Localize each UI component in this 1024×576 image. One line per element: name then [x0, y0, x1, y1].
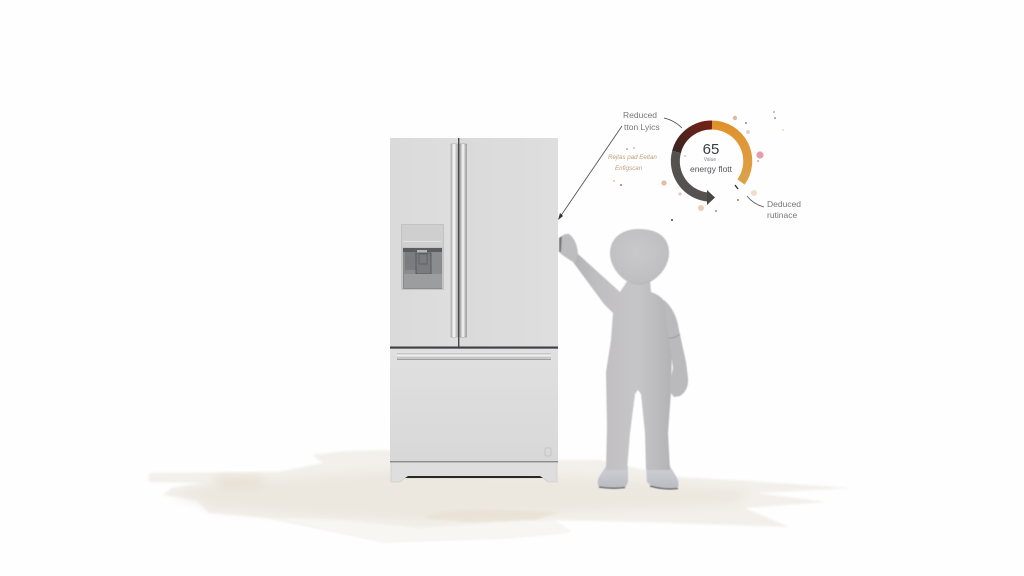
seam between doors and drawer	[390, 346, 558, 349]
left upper door	[390, 138, 458, 347]
small handwritten note: Rejtas pad Eeltan	[608, 154, 657, 161]
gauge label: energy flott	[690, 164, 733, 174]
freezer drawer	[390, 349, 558, 462]
head	[610, 229, 669, 285]
refrigerator	[390, 138, 558, 482]
callout line to refrigerator	[558, 126, 622, 220]
drawer handle	[397, 353, 551, 360]
lowered arm	[664, 300, 688, 397]
water dispenser	[401, 224, 444, 290]
drawer indicator	[545, 448, 551, 456]
forearm crease	[668, 334, 680, 338]
door gap	[458, 138, 459, 348]
gauge caption: Value	[704, 157, 716, 163]
torso, legs and raised arm	[573, 254, 672, 470]
decorative splatter dots	[613, 111, 784, 221]
small handwritten note: Enfigscan	[615, 165, 643, 172]
label: reduced top	[623, 110, 660, 132]
gauge grey segment with arrow	[675, 152, 715, 205]
label: reduced top: Reduced	[623, 110, 657, 120]
pointer to gauge top	[664, 118, 682, 128]
label: reduced bottom: Deduced	[767, 199, 801, 209]
label: reduced top: tton Lyics	[624, 122, 660, 132]
gauge dark red segment	[676, 125, 712, 152]
left door handle	[451, 144, 458, 337]
floor stain	[149, 450, 851, 542]
base plinth	[390, 461, 558, 482]
gauge orange segment	[712, 125, 748, 182]
gripping hand	[559, 234, 578, 263]
right door handle	[460, 144, 466, 337]
person figure	[559, 229, 688, 489]
label: reduced bottom	[767, 199, 801, 220]
shoes	[598, 466, 678, 489]
pointer to gauge bottom	[735, 185, 764, 207]
right upper door	[459, 138, 558, 347]
gauge value: 65	[703, 141, 719, 158]
energy gauge	[675, 125, 748, 205]
label: reduced bottom: rutinace	[767, 210, 798, 220]
small handwritten note	[608, 154, 657, 172]
